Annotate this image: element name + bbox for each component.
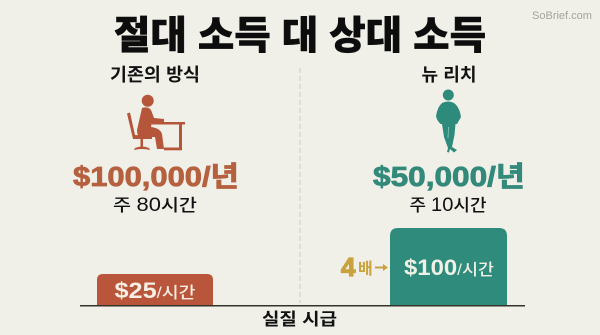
center divider <box>299 68 301 303</box>
multiplier callout: 4 <box>341 252 356 282</box>
icon: person at desk <box>127 95 185 150</box>
right bar <box>390 228 507 305</box>
left weekly hours: 주 80시간 <box>113 195 197 216</box>
watermark: SoBrief.com <box>532 10 592 22</box>
left bar <box>97 274 213 305</box>
left column heading: 기존의 방식 <box>110 61 200 87</box>
right bar label: $100 /시간 <box>404 255 494 280</box>
axis label: 실질 시급 <box>262 305 337 330</box>
baseline axis <box>80 305 525 306</box>
right annual income: $50,000/년 <box>373 161 525 192</box>
left bar label: $25 /시간 <box>114 278 196 303</box>
multiplier callout: 배 <box>358 255 373 279</box>
right weekly hours: 주 10시간 <box>410 195 487 216</box>
left annual income: $100,000/년 <box>73 161 239 192</box>
icon: standing person <box>436 90 461 152</box>
title: 절대 소득 대 상대 소득 <box>114 5 486 61</box>
multiplier callout <box>341 252 388 282</box>
right column heading: 뉴 리치 <box>422 61 476 87</box>
